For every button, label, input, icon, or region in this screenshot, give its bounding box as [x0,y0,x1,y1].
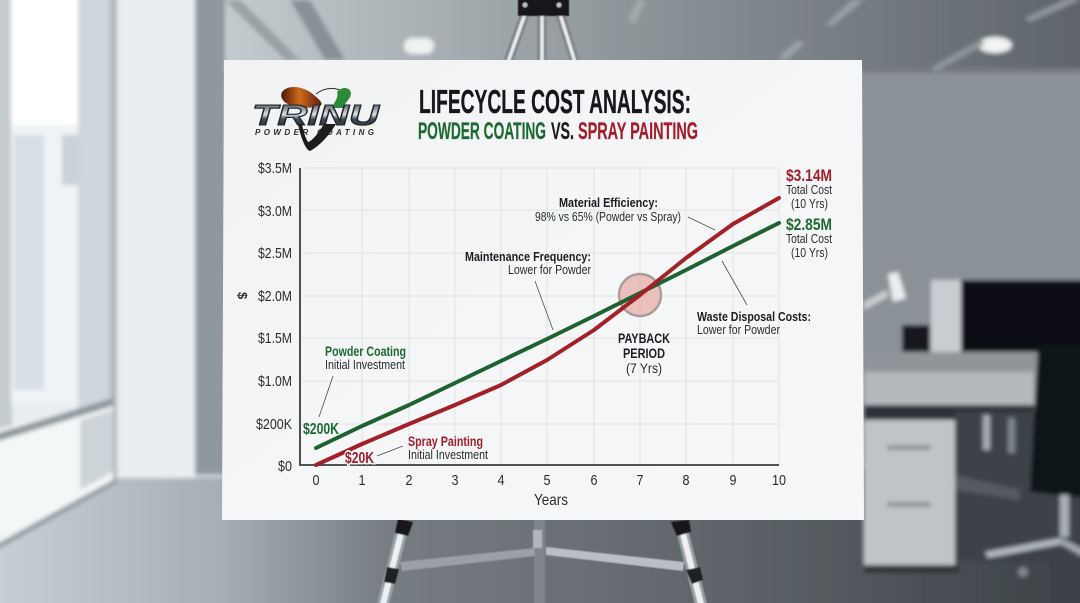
logo: black swoosh [298,124,336,151]
end label: powder total cost: Total Cost [786,231,832,246]
callout: waste disposal costs [697,261,811,337]
callout: maintenance frequency [465,249,592,330]
callout: spray initial investment [345,433,488,467]
title: SPRAY PAINTING [578,118,698,145]
x axis labels: 10 [772,472,786,489]
y axis labels: $1.5M [258,330,292,347]
payback circle [619,274,661,316]
end label: spray total cost: Total Cost [786,182,832,197]
callout: powder initial investment: Initial Investment [325,357,405,372]
chart axes [300,168,779,465]
spray painting cost line [316,198,779,465]
x axis labels: 5 [544,472,550,489]
x axis title: Years [534,492,568,509]
callout: waste disposal costs: Waste Disposal Costs: [697,309,811,324]
y axis labels: $3.0M [258,203,292,220]
easel: lower legs and braces [382,518,703,603]
end label: spray total cost: (10 Yrs) [791,196,828,211]
callout: material efficiency: Material Efficiency: [559,195,658,210]
callout: material efficiency: 98% vs 65% (Powder vs Spray) [535,209,681,224]
callout: spray initial investment: $20K [345,450,374,467]
end label: spray total cost: $3.14M [786,166,832,185]
callout: maintenance frequency: Maintenance Frequency: [465,249,591,264]
whiteboard panel [222,60,864,520]
callout: payback period [618,330,670,376]
title: LIFECYCLE COST ANALYSIS: [419,83,691,120]
y axis labels: $2.0M [258,288,292,305]
end label: powder total cost [786,215,832,260]
y axis title: rotated dollar sign: $ [235,292,250,300]
callout: powder initial investment: $200K [303,421,339,438]
callout: powder initial investment [303,343,406,438]
x axis labels: 0 [312,472,320,489]
logo: green shape [332,88,351,108]
x axis labels: 8 [682,472,690,489]
callout: payback period: PERIOD [623,345,665,361]
x axis labels [312,472,786,489]
x axis labels: 6 [590,472,598,489]
x axis labels: 7 [636,472,644,489]
callout: spray initial investment: Spray Painting [408,433,483,449]
callout: spray initial investment: Initial Investment [408,447,488,462]
y axis labels [256,160,292,475]
end label: spray total cost [786,166,832,211]
title [418,83,698,145]
callout: payback period: (7 Yrs) [626,360,662,376]
line chart [235,160,832,509]
x axis labels: 3 [452,472,458,489]
x axis labels: 2 [406,472,412,489]
logo: red oval [281,87,322,108]
logo: powder coating tagline: POWDER COATING [255,128,374,137]
logo: Trinu Powder Coating [252,87,381,151]
x axis labels: 9 [730,472,736,489]
powder coating cost line [316,223,779,448]
x axis labels: 1 [358,472,366,489]
title: POWDER COATING [418,118,546,145]
y axis labels: $200K [256,416,292,433]
logo: arc to green shape [316,88,340,94]
logo: TRINU wordmark: TRINU [252,100,381,132]
y axis labels: $0 [278,458,292,475]
callout: payback period: PAYBACK [618,330,670,346]
callout: waste disposal costs: Lower for Powder [697,322,781,337]
y axis labels: $2.5M [258,245,292,262]
callout: powder initial investment: Powder Coating [325,343,406,359]
end label: powder total cost: (10 Yrs) [791,245,828,260]
x axis labels: 4 [498,472,504,489]
easel: top bracket and legs [508,0,575,62]
callout: maintenance frequency: Lower for Powder [508,262,592,277]
end label: powder total cost: $2.85M [786,215,832,234]
y axis labels: $1.0M [258,373,292,390]
callout: material efficiency [535,195,715,230]
title: VS. [551,118,574,145]
y axis labels: $3.5M [258,160,292,177]
